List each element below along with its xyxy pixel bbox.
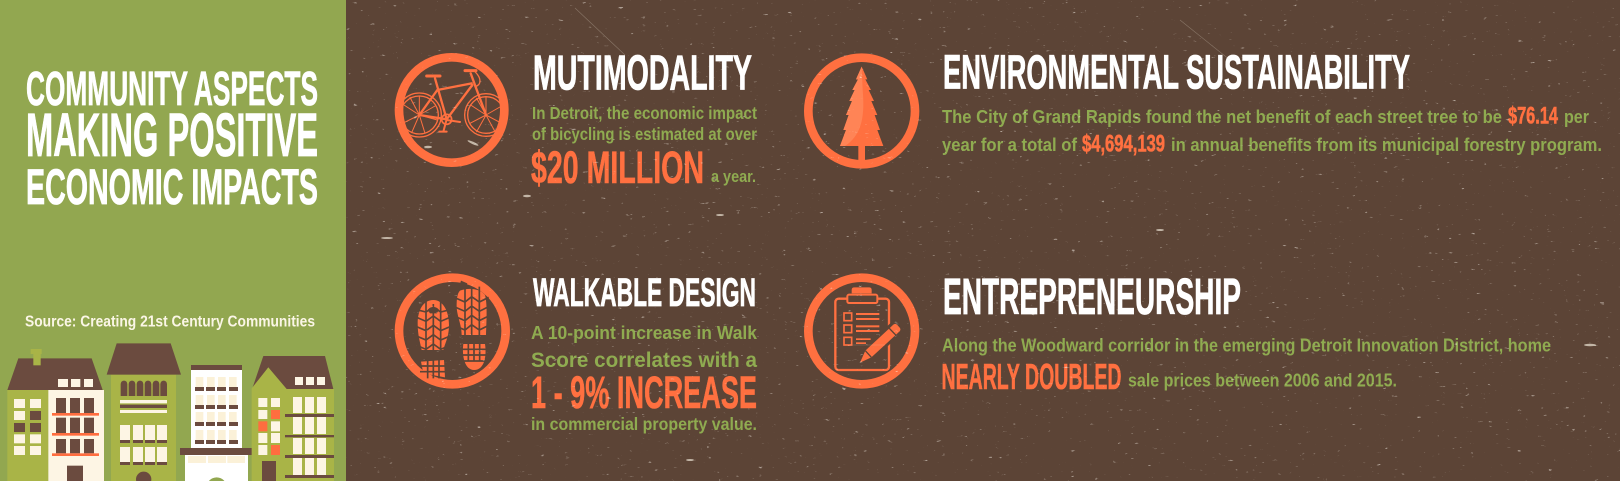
body text [531, 103, 757, 193]
body text: In Detroit, the economic impact [532, 103, 757, 123]
section: walkable design [399, 271, 758, 434]
right sole [454, 287, 489, 370]
panel: green sidebar [0, 0, 346, 481]
body text: Along the Woodward corridor in the emerging Detroit Innovation District, home [942, 336, 1551, 356]
heading: ENTREPRENEURSHIP [943, 268, 1241, 325]
body text [531, 323, 758, 434]
body text: year for a total of [942, 135, 1078, 155]
body text: of bicycling is estimated at over [532, 124, 757, 144]
body text: NEARLY DOUBLED [942, 356, 1122, 397]
body text: $4,694,139 [1082, 130, 1165, 158]
body text: per [1564, 107, 1589, 127]
building 3 [180, 365, 252, 481]
section: multimodality [397, 46, 757, 193]
body text: sale prices between 2006 and 2015. [1128, 370, 1397, 390]
body text: $20 MILLION [531, 142, 704, 193]
heading: WALKABLE DESIGN [533, 271, 756, 315]
body text: a year. [711, 168, 756, 186]
icon: pine tree [808, 58, 915, 164]
body text: The City of Grand Rapids found the net benefit of each street tree to be [942, 107, 1502, 127]
title: ECONOMIC IMPACTS [26, 159, 318, 215]
icon: boot prints [399, 278, 506, 384]
building 1 [7, 349, 104, 481]
left sole [415, 300, 452, 378]
body text: 1 - 9% INCREASE [531, 367, 757, 418]
body text: $76.14 [1508, 102, 1558, 130]
illustration: row of buildings [7, 343, 334, 481]
section: environmental sustainability [808, 46, 1602, 164]
building 2 [107, 343, 181, 481]
section: entrepreneurship [808, 268, 1551, 397]
body text: in commercial property value. [531, 414, 757, 434]
title [26, 63, 318, 215]
source line: Source: Creating 21st Century Communities [25, 314, 315, 330]
title: COMMUNITY ASPECTS [26, 63, 318, 116]
icon: clipboard and pencil [808, 278, 915, 384]
body text: A 10-point increase in Walk [531, 323, 758, 343]
body text [942, 336, 1551, 397]
heading: MUTIMODALITY [533, 46, 752, 100]
body text [942, 102, 1602, 158]
building 4 [252, 356, 334, 481]
body text: Score correlates with a [531, 349, 757, 372]
icon: bicycle [397, 57, 507, 163]
title: MAKING POSITIVE [26, 101, 318, 169]
